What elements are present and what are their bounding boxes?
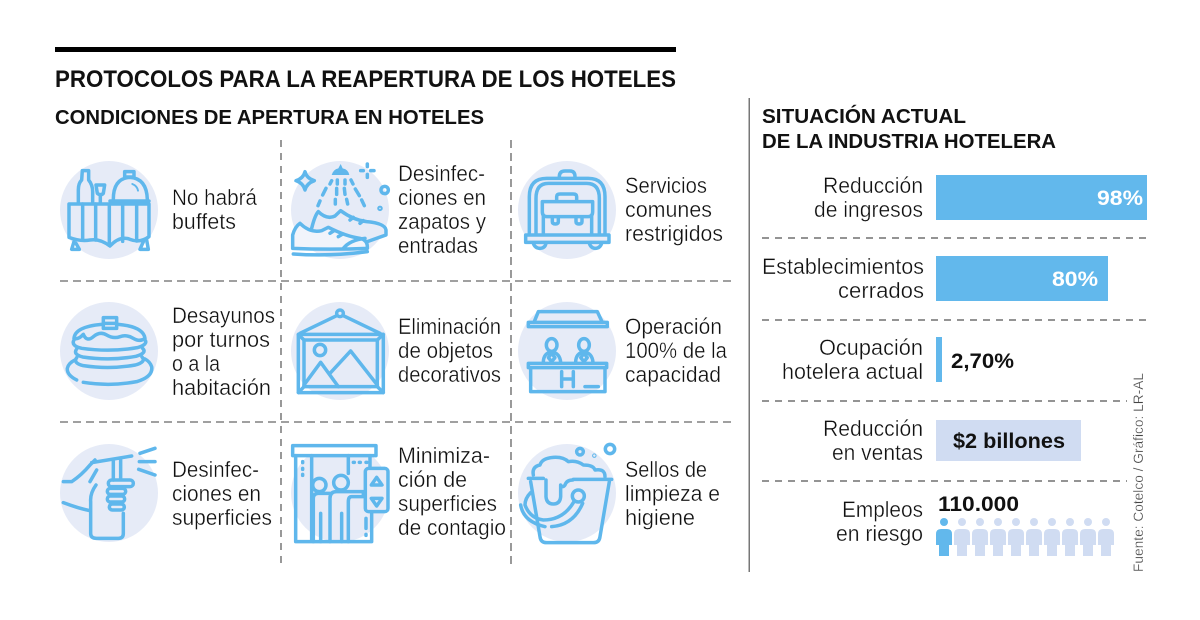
text: decorative objects: de objetos [398,338,493,363]
top rule [55,47,676,52]
cell: breakfast [60,302,275,400]
icon: disinfected shoes [293,164,388,255]
pictogram: people [936,518,1114,556]
row: current occupancy: hotelera actual [782,359,923,384]
heading: current situation: DE LA INDUSTRIA HOTELERA [762,131,1056,153]
text: shoes [398,161,486,258]
text: contact surfaces: Minimiza- [398,443,490,468]
text: breakfast: habitación [172,375,271,400]
text: common services: restrigidos [625,221,723,246]
panel: current situation [762,104,1147,556]
row: closed establishments: cerrados [838,278,924,303]
icon: spray bottle [63,448,155,538]
text: surfaces [172,457,272,530]
row: jobs at risk: 110.000 [938,493,1019,516]
heading: current situation [762,104,1056,153]
text: contact surfaces: superficies [398,491,497,516]
text: shoes: Desinfec- [398,161,485,186]
panel: conditions grid [60,161,728,543]
text: contact surfaces: ción de [398,467,467,492]
cell: hygiene seals [518,444,720,543]
cell: contact surfaces [291,443,506,542]
cell: surfaces [60,444,272,542]
icon: hotel reception [528,312,607,392]
text: contact surfaces [398,443,506,540]
row: income reduction [814,173,1147,222]
text: decorative objects [398,314,501,387]
icon: luggage cart [526,171,609,248]
source credit: Fuente: Cotelco / Gráfico: LR-AL [1130,373,1146,572]
cell: shoes [291,161,486,259]
row: closed establishments: Establecimientos [762,254,924,279]
cell: common services [518,161,723,259]
row: jobs at risk: en riesgo [836,521,923,546]
text: hygiene seals: limpieza e [625,481,720,506]
text: decorative objects: decorativos [398,362,501,387]
text: hygiene seals [625,457,720,530]
text: shoes: zapatos y [398,209,486,234]
text: hygiene seals: higiene [625,505,695,530]
row: sales reduction [823,416,1081,465]
icon: pancakes [67,318,152,384]
text: capacity [625,314,728,387]
text: breakfast: Desayunos [172,303,275,328]
text: breakfast: o a la [172,351,221,376]
text: decorative objects: Eliminación [398,314,501,339]
title: PROTOCOLOS PARA LA REAPERTURA DE LOS HOTELES [55,66,676,93]
text: common services: Servicios [625,173,707,198]
text: breakfast [172,303,275,400]
text: surfaces: superficies [172,505,272,530]
row: current occupancy: Ocupación [819,335,923,360]
text: capacity: capacidad [625,362,721,387]
row: current occupancy: 2,70% [951,350,1014,373]
row: sales reduction: en ventas [832,440,923,465]
row: jobs at risk [836,493,1114,556]
heading: conditions: CONDICIONES DE APERTURA EN HOTELES [55,107,484,129]
text: capacity: 100% de la [625,338,728,363]
icon: elevator [293,446,388,542]
text: no buffets: No habrá [172,185,258,210]
row: income reduction: de ingresos [814,197,923,222]
text: common services: comunes [625,197,712,222]
row: closed establishments [762,254,1108,303]
text: common services [625,173,723,246]
text: no buffets [172,185,258,234]
text: shoes: ciones en [398,185,486,210]
text: breakfast: por turnos [172,327,270,352]
row: sales reduction: Reducción [823,416,923,441]
text: hygiene seals: Sellos de [625,457,707,482]
icon: soapy bucket [521,444,615,543]
text: contact surfaces: de contagio [398,515,506,540]
row: sales reduction: $2 billones [953,430,1065,453]
divider: column separator [748,98,750,572]
text: shoes: entradas [398,233,478,258]
heading: current situation: SITUACIÓN ACTUAL [762,104,966,128]
cell: no buffets [60,161,258,259]
icon: buffet table [69,171,149,249]
text: capacity: Operación [625,314,722,339]
row: current occupancy [782,335,1014,384]
row: jobs at risk: Empleos [842,497,923,522]
row: income reduction: Reducción [823,173,923,198]
cell: capacity [518,302,728,400]
icon: framed picture [298,310,383,393]
text: surfaces: ciones en [172,481,261,506]
row: closed establishments: 80% [1052,268,1098,291]
row: income reduction: 98% [1097,187,1143,210]
text: no buffets: buffets [172,209,236,234]
text: surfaces: Desinfec- [172,457,259,482]
cell: decorative objects [291,302,501,400]
